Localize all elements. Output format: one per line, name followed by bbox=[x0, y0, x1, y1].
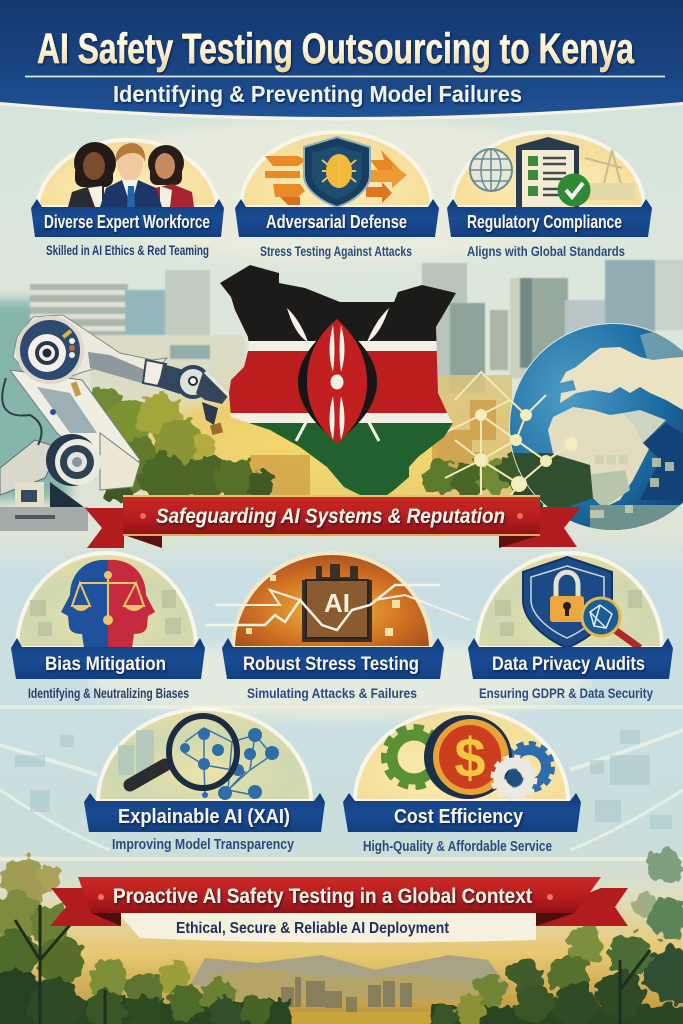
caption: High-Quality & Affordable Service bbox=[363, 839, 552, 855]
banner bbox=[235, 199, 439, 237]
banner bbox=[447, 199, 652, 237]
icon: three people bbox=[68, 142, 194, 207]
banner bbox=[31, 199, 224, 237]
Kenya map with flag and shield bbox=[220, 265, 456, 495]
icon: cracked AI chip bbox=[205, 564, 470, 642]
banner title: Adversarial Defense bbox=[266, 212, 407, 232]
caption: Stress Testing Against Attacks bbox=[260, 243, 412, 259]
icon: gears and dollar coin: $ bbox=[454, 726, 486, 789]
globe bbox=[505, 320, 683, 535]
ribbon: Safeguarding bbox=[85, 495, 581, 548]
banner title: Regulatory Compliance bbox=[467, 212, 622, 232]
caption: Simulating Attacks & Failures bbox=[247, 685, 417, 701]
icon: shield, padlock and magnifier bbox=[495, 557, 642, 648]
banner title: Robust Stress Testing bbox=[243, 654, 419, 675]
dome bbox=[37, 140, 218, 207]
network graph bbox=[440, 372, 577, 510]
card: Bias Mitigation bbox=[11, 553, 205, 701]
caption: Aligns with Global Standards bbox=[467, 243, 625, 259]
header bbox=[0, 0, 683, 120]
banner bbox=[343, 793, 581, 832]
banner bbox=[11, 638, 205, 679]
caption: Skilled in AI Ethics & Red Teaming bbox=[46, 242, 209, 258]
subtitle: Identifying & Preventing Model Failures bbox=[113, 81, 522, 107]
Maasai shield and spears bbox=[287, 308, 389, 444]
card: Robust Stress Testing bbox=[205, 553, 470, 701]
dome bbox=[98, 709, 311, 801]
caption: Identifying & Neutralizing Biases bbox=[28, 685, 189, 701]
card: Diverse Expert Workforce bbox=[31, 140, 224, 258]
robot arm bbox=[0, 315, 230, 531]
card: Explainable AI (XAI) bbox=[84, 709, 325, 853]
dome bbox=[17, 553, 196, 648]
ribbon: Proactive AI Safety Testing: Proactive AI Safety Testing in a Global Context bbox=[113, 885, 532, 908]
ribbon: Safeguarding: Safeguarding AI Systems & Reputation bbox=[156, 505, 505, 528]
banner title: Diverse Expert Workforce bbox=[44, 212, 210, 232]
landscape: mountains, city and trees bbox=[0, 850, 683, 1024]
icon: two heads and scales bbox=[30, 560, 181, 648]
card: Data Privacy Audits bbox=[468, 553, 673, 701]
golden ground glow with trees bbox=[70, 375, 610, 525]
icon: cracked AI chip: AI bbox=[324, 588, 350, 618]
icon: globe, checklist and check badge bbox=[470, 137, 635, 207]
banner bbox=[468, 638, 673, 679]
caption: Improving Model Transparency bbox=[112, 837, 294, 853]
banner bbox=[84, 793, 325, 832]
icon: magnifier over neural network bbox=[118, 716, 279, 800]
banner bbox=[222, 638, 444, 679]
dome bbox=[233, 553, 431, 648]
ribbon: Proactive AI Safety Testing bbox=[50, 877, 628, 943]
ribbon subtitle panel bbox=[118, 913, 536, 943]
card: Cost Efficiency bbox=[343, 709, 581, 855]
dome bbox=[241, 132, 432, 207]
banner title: Explainable AI (XAI) bbox=[118, 806, 290, 828]
city skyline backdrop bbox=[30, 260, 683, 400]
card: Adversarial Defense bbox=[235, 132, 439, 259]
card: Regulatory Compliance bbox=[447, 132, 652, 259]
icon: arrows and shield with bug bbox=[265, 137, 407, 207]
dome bbox=[355, 709, 568, 801]
dome bbox=[452, 132, 644, 207]
banner title: Bias Mitigation bbox=[45, 654, 166, 675]
ribbon subtitle panel: Ethical, Secure & Reliable AI Deployment bbox=[176, 920, 450, 937]
banner title: Data Privacy Audits bbox=[492, 654, 645, 675]
icon: gears and dollar coin bbox=[385, 715, 552, 799]
flag bands bbox=[220, 265, 456, 495]
banner title: Cost Efficiency bbox=[394, 806, 524, 828]
dome bbox=[477, 553, 662, 648]
